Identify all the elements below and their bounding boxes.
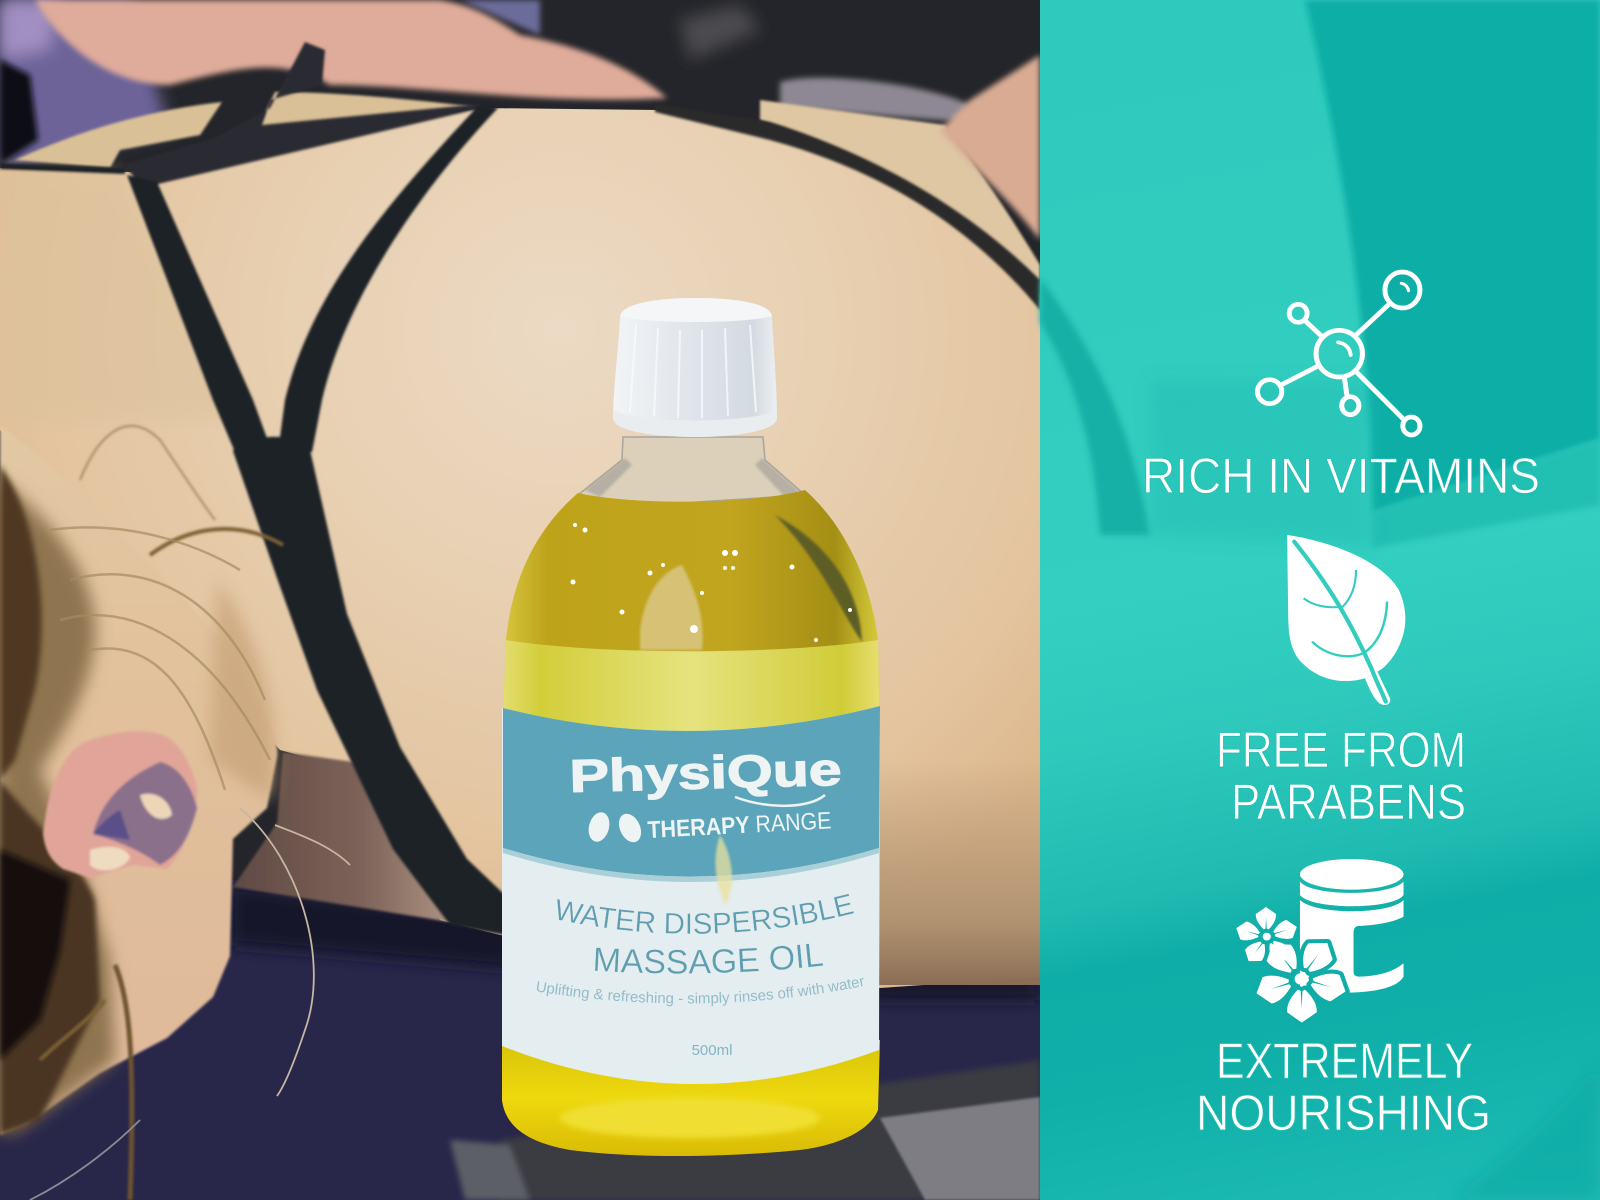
panel soft photo shapes xyxy=(1040,0,1600,1200)
tagline: Uplifting & refreshing - simply rinses off with water xyxy=(536,978,864,1006)
label: free from parabens xyxy=(1216,722,1466,830)
label: free from parabens: PARABENS xyxy=(1231,774,1466,830)
icon: jar and flowers xyxy=(1233,859,1404,1023)
glass neck highlights xyxy=(585,458,800,497)
panel background xyxy=(1040,0,1600,1200)
bright oil band above label xyxy=(502,640,880,745)
head and neck xyxy=(0,425,350,1200)
oil surface shadow xyxy=(775,515,862,642)
label: extremely nourishing: NOURISHING xyxy=(1196,1085,1491,1141)
oil lower body xyxy=(502,1040,880,1156)
purple background at top left xyxy=(0,0,540,170)
label blue band xyxy=(503,706,880,876)
bottle base highlight xyxy=(560,1098,820,1138)
logo swoosh xyxy=(735,795,825,806)
range text: THERAPY RANGE xyxy=(647,807,832,844)
hair xyxy=(0,426,350,1200)
panel: teal benefits xyxy=(1040,0,1600,1200)
small flower xyxy=(1233,907,1300,967)
back and shoulder xyxy=(0,55,1040,988)
large flower xyxy=(1252,935,1350,1023)
blurred dark clothing highlights xyxy=(680,5,760,60)
product name line two: MASSAGE OIL xyxy=(594,944,824,974)
product name line one: WATER DISPERSIBLE xyxy=(557,894,854,934)
hand resting on back xyxy=(35,0,667,99)
label: extremely nourishing xyxy=(1196,1033,1491,1141)
label band soft edge xyxy=(503,848,879,882)
jar xyxy=(1300,859,1404,993)
panel: photo of back massage xyxy=(0,0,1040,1200)
neck shadow xyxy=(233,752,450,922)
label background xyxy=(502,706,880,1084)
icon: molecule xyxy=(1257,272,1420,435)
label: free from parabens: FREE FROM xyxy=(1216,722,1466,778)
brand logo text: PhysiQue xyxy=(569,743,842,802)
bottle glass neck xyxy=(578,437,805,505)
hands icon xyxy=(585,810,645,846)
black bra straps xyxy=(0,42,1040,935)
ear xyxy=(43,731,197,878)
icon: leaf xyxy=(1287,535,1405,705)
cap xyxy=(613,298,777,437)
reflection on oil xyxy=(640,565,703,650)
photo backdrop xyxy=(0,0,1040,1200)
label: rich in vitamins: RICH IN VITAMINS xyxy=(1142,448,1540,504)
massage table sheet xyxy=(0,880,1040,1200)
label reflections xyxy=(715,835,732,905)
logo on dark clothing xyxy=(780,78,970,122)
massage oil bottle xyxy=(502,298,880,1156)
oil upper body xyxy=(502,490,880,745)
specular glints xyxy=(570,523,852,642)
label: extremely nourishing: EXTREMELY xyxy=(1216,1033,1473,1089)
volume: 500ml xyxy=(692,1042,732,1059)
